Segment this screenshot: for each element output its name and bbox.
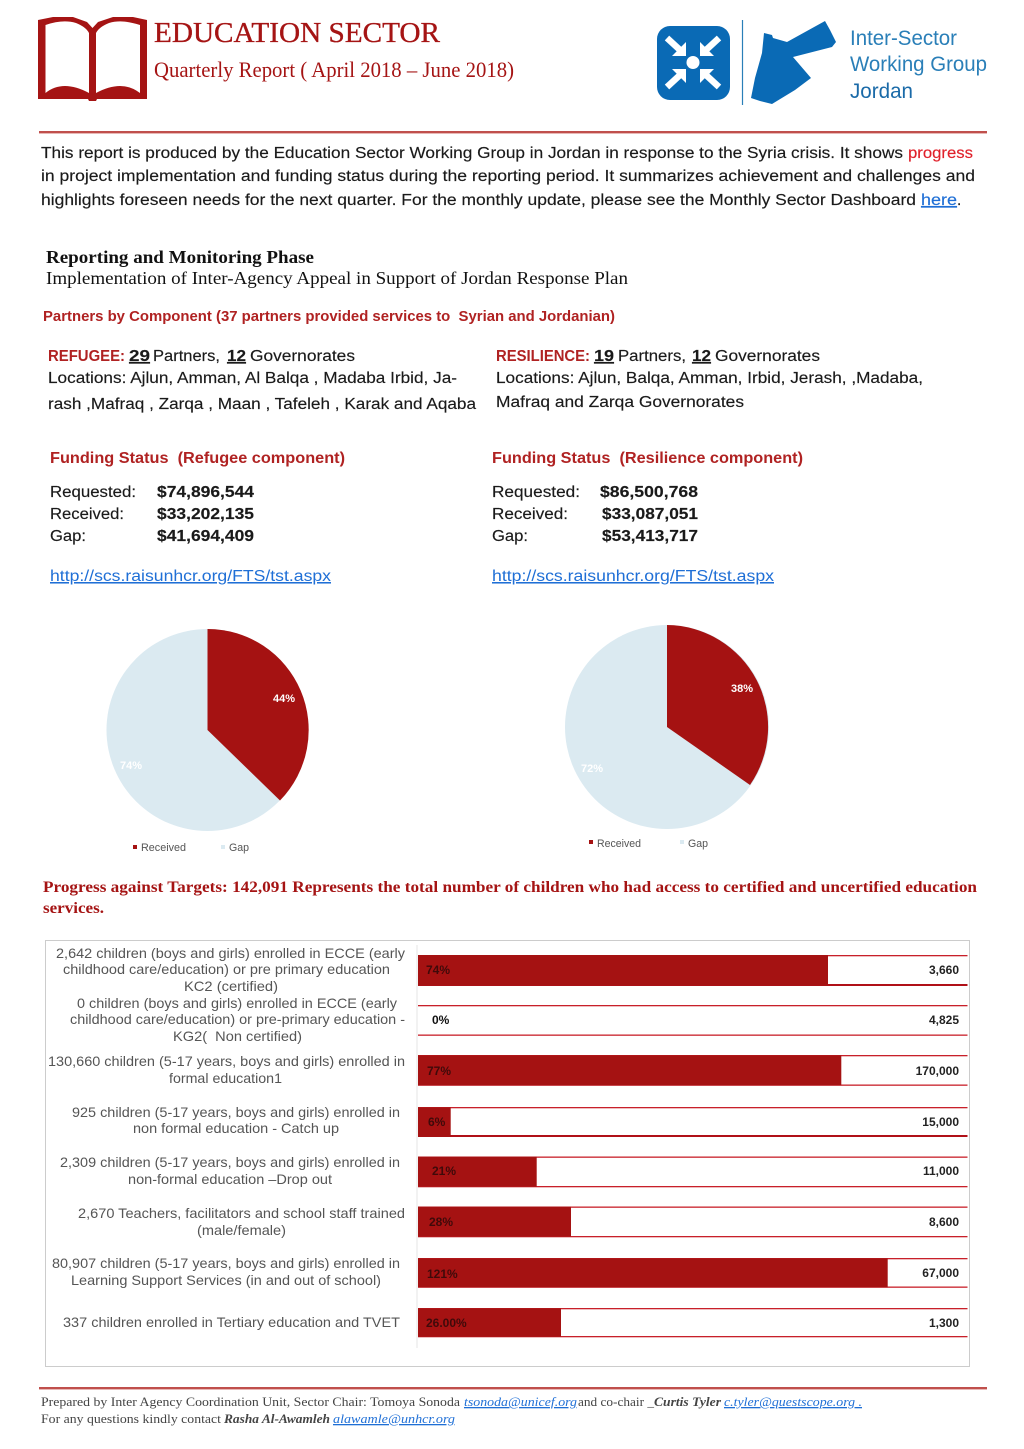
row: teachers trained: (male/female) <box>197 1222 286 1238</box>
panel: funding status refugee <box>50 450 345 585</box>
row: ECCE certified: childhood care/education) or pre primary education <box>63 961 390 977</box>
row: ECCE non certified: 4,825 <box>929 1013 959 1027</box>
panel: funding status resilience: Gap: <box>492 528 528 545</box>
pie chart: resilience funding: Gap <box>688 838 708 850</box>
panel: funding status refugee: $74,896,544 <box>157 484 254 501</box>
panel: resilience partners: RESILIENCE: <box>496 348 590 365</box>
heading: progress against targets: services. <box>43 900 104 917</box>
panel: funding status resilience: $33,087,051 <box>602 506 698 523</box>
footer credits: c.tyler@questscope.org . <box>724 1394 862 1409</box>
footer credits: Rasha Al-Awamleh <box>223 1411 330 1426</box>
row: tertiary and TVET: 1,300 <box>929 1316 959 1330</box>
heading: reporting and monitoring phase: Implementation of Inter-Agency Appeal in Support of Jordan Response Plan <box>46 268 628 288</box>
logo: Inter-Sector Working Group Jordan <box>657 20 987 105</box>
intro text: in project implementation and funding status during the reporting period. It summarizes achievement and challenges and <box>41 168 975 185</box>
panel: funding status resilience <box>492 450 803 585</box>
heading: reporting and monitoring phase: Reporting and Monitoring Phase <box>46 247 314 267</box>
row: tertiary and TVET: 337 children enrolled in Tertiary education and TVET <box>63 1314 400 1330</box>
panel: resilience partners: Governorates <box>715 348 820 365</box>
heading: progress against targets <box>43 879 977 917</box>
intro text <box>41 145 975 209</box>
panel: resilience partners: Mafraq and Zarqa Governorates <box>496 394 744 411</box>
heading: partners by component: Partners by Component (37 partners provided services to Syrian and Jordanian) <box>43 309 615 325</box>
row: catch up: 6% <box>428 1115 446 1129</box>
footer credits: Curtis Tyler <box>654 1394 722 1409</box>
row: ECCE non certified <box>70 995 968 1044</box>
pie chart: refugee funding <box>106 629 309 854</box>
row: ECCE certified: 74% <box>426 963 450 977</box>
panel: funding status resilience: http://scs.raisunhcr.org/FTS/tst.aspx <box>492 568 774 585</box>
row: catch up: non formal education - Catch up <box>133 1120 339 1136</box>
panel: resilience partners <box>496 348 923 411</box>
row: formal education <box>48 1053 968 1086</box>
panel: refugee partners: Partners, <box>153 348 220 365</box>
panel: funding status resilience: Received: <box>492 506 568 523</box>
logo text <box>850 27 987 103</box>
icon: open book <box>38 17 147 101</box>
logo text: Jordan <box>850 80 913 103</box>
row: drop out: 21% <box>432 1164 456 1178</box>
panel: funding status refugee: Received: <box>50 506 124 523</box>
pie chart: resilience funding <box>565 625 769 850</box>
row: catch up <box>72 1104 968 1137</box>
panel: refugee partners: 29 <box>129 348 150 365</box>
row: ECCE non certified: 0% <box>432 1013 450 1027</box>
footer credits: alawamle@unhcr.org <box>333 1411 456 1426</box>
panel: funding status refugee: $41,694,409 <box>157 528 254 545</box>
row: catch up: 925 children (5-17 years, boys and girls) enrolled in <box>72 1104 400 1120</box>
row: ECCE non certified: childhood care/education) or pre-primary education - <box>70 1011 405 1027</box>
logo text: Working Group <box>850 53 987 76</box>
title: EDUCATION SECTOR <box>154 18 440 49</box>
row: catch up: 15,000 <box>922 1115 959 1129</box>
row: teachers trained <box>78 1205 968 1238</box>
icon: map of Jordan <box>751 21 836 104</box>
heading: progress against targets: Progress against Targets: 142,091 Represents the total number of children who had access to certified and uncertified education <box>43 879 977 896</box>
row: learning support services: Learning Support Services (in and out of school) <box>71 1272 381 1288</box>
intro text: highlights foreseen needs for the next quarter. For the monthly update, please see the Monthly Sector Dashboard <box>41 192 916 209</box>
row: formal education: formal education1 <box>169 1070 282 1086</box>
footer credits: tsonoda@unicef.org <box>464 1394 578 1409</box>
row: formal education: 170,000 <box>916 1064 959 1078</box>
footer credits: and co-chair _ <box>578 1394 655 1409</box>
row: ECCE certified: 2,642 children (boys and girls) enrolled in ECCE (early <box>56 945 405 961</box>
pie chart: resilience funding: 38% <box>731 683 753 695</box>
panel: funding status resilience: Funding Status (Resilience component) <box>492 450 803 467</box>
row: drop out: non-formal education –Drop out <box>128 1171 332 1187</box>
row: ECCE certified: 3,660 <box>929 963 959 977</box>
row: learning support services <box>52 1255 968 1288</box>
panel: funding status resilience: Requested: <box>492 484 580 501</box>
row: formal education: 130,660 children (5-17 years, boys and girls) enrolled in <box>48 1053 405 1069</box>
pie chart: refugee funding: 74% <box>120 760 142 772</box>
footer credits: For any questions kindly contact <box>41 1411 221 1426</box>
pie chart: refugee funding: Gap <box>229 842 249 854</box>
panel: resilience partners: 12 <box>692 348 711 365</box>
panel: funding status refugee: http://scs.raisunhcr.org/FTS/tst.aspx <box>50 568 331 585</box>
row: ECCE non certified: 0 children (boys and girls) enrolled in ECCE (early <box>77 995 397 1011</box>
row: drop out <box>60 1154 968 1187</box>
panel: funding status refugee: Requested: <box>50 484 136 501</box>
panel: funding status refugee: Gap: <box>50 528 86 545</box>
row: teachers trained: 28% <box>429 1215 453 1229</box>
footer credits <box>41 1394 862 1426</box>
row: learning support services: 67,000 <box>922 1266 959 1280</box>
intro text: here <box>921 192 957 209</box>
title <box>154 18 514 82</box>
panel: refugee partners <box>48 348 476 413</box>
row: learning support services: 121% <box>427 1267 458 1281</box>
panel: resilience partners: Locations: Ajlun, Balqa, Amman, Irbid, Jerash, ,Madaba, <box>496 370 923 387</box>
icon: converging arrows <box>657 26 730 100</box>
title: Quarterly Report ( April 2018 – June 2018) <box>154 57 514 82</box>
pie chart: resilience funding: 72% <box>581 763 603 775</box>
row: teachers trained: 2,670 Teachers, facilitators and school staff trained <box>78 1205 405 1221</box>
row: teachers trained: 8,600 <box>929 1215 959 1229</box>
pie chart: refugee funding: Received <box>141 842 186 854</box>
row: ECCE non certified: KG2( Non certified) <box>173 1028 302 1044</box>
row: ECCE certified <box>56 945 968 994</box>
row: learning support services: 80,907 children (5-17 years, boys and girls) enrolled in <box>52 1255 400 1271</box>
panel: funding status refugee: Funding Status (Refugee component) <box>50 450 345 467</box>
panel: refugee partners: REFUGEE: <box>48 348 125 365</box>
panel: refugee partners: Governorates <box>250 348 355 365</box>
row: tertiary and TVET: 26.00% <box>426 1316 467 1330</box>
panel: refugee partners: 12 <box>227 348 246 365</box>
panel: refugee partners: Locations: Ajlun, Amman, Al Balqa , Madaba Irbid, Ja- <box>48 370 457 387</box>
panel: refugee partners: rash ,Mafraq , Zarqa , Maan , Tafeleh , Karak and Aqaba <box>48 396 476 413</box>
intro text: This report is produced by the Education Sector Working Group in Jordan in response to the Syria crisis. It shows <box>41 145 903 162</box>
row: ECCE certified: KC2 (certified) <box>184 978 278 994</box>
panel: funding status resilience: $86,500,768 <box>600 484 698 501</box>
intro text: . <box>957 192 961 209</box>
row: tertiary and TVET <box>63 1308 968 1337</box>
intro text: progress <box>908 145 973 162</box>
panel: funding status resilience: $53,413,717 <box>602 528 698 545</box>
logo text: Inter-Sector <box>850 27 957 50</box>
pie chart: resilience funding: Received <box>597 838 641 850</box>
footer credits: Prepared by Inter Agency Coordination Unit, Sector Chair: Tomoya Sonoda <box>41 1394 460 1409</box>
panel: resilience partners: Partners, <box>618 348 686 365</box>
row: drop out: 2,309 children (5-17 years, boys and girls) enrolled in <box>60 1154 400 1170</box>
panel: funding status refugee: $33,202,135 <box>157 506 254 523</box>
panel: progress table <box>46 940 970 1366</box>
panel: resilience partners: 19 <box>594 348 614 365</box>
row: formal education: 77% <box>427 1064 451 1078</box>
heading: reporting and monitoring phase <box>46 247 628 288</box>
pie chart: refugee funding: 44% <box>273 693 295 705</box>
row: drop out: 11,000 <box>923 1164 959 1178</box>
